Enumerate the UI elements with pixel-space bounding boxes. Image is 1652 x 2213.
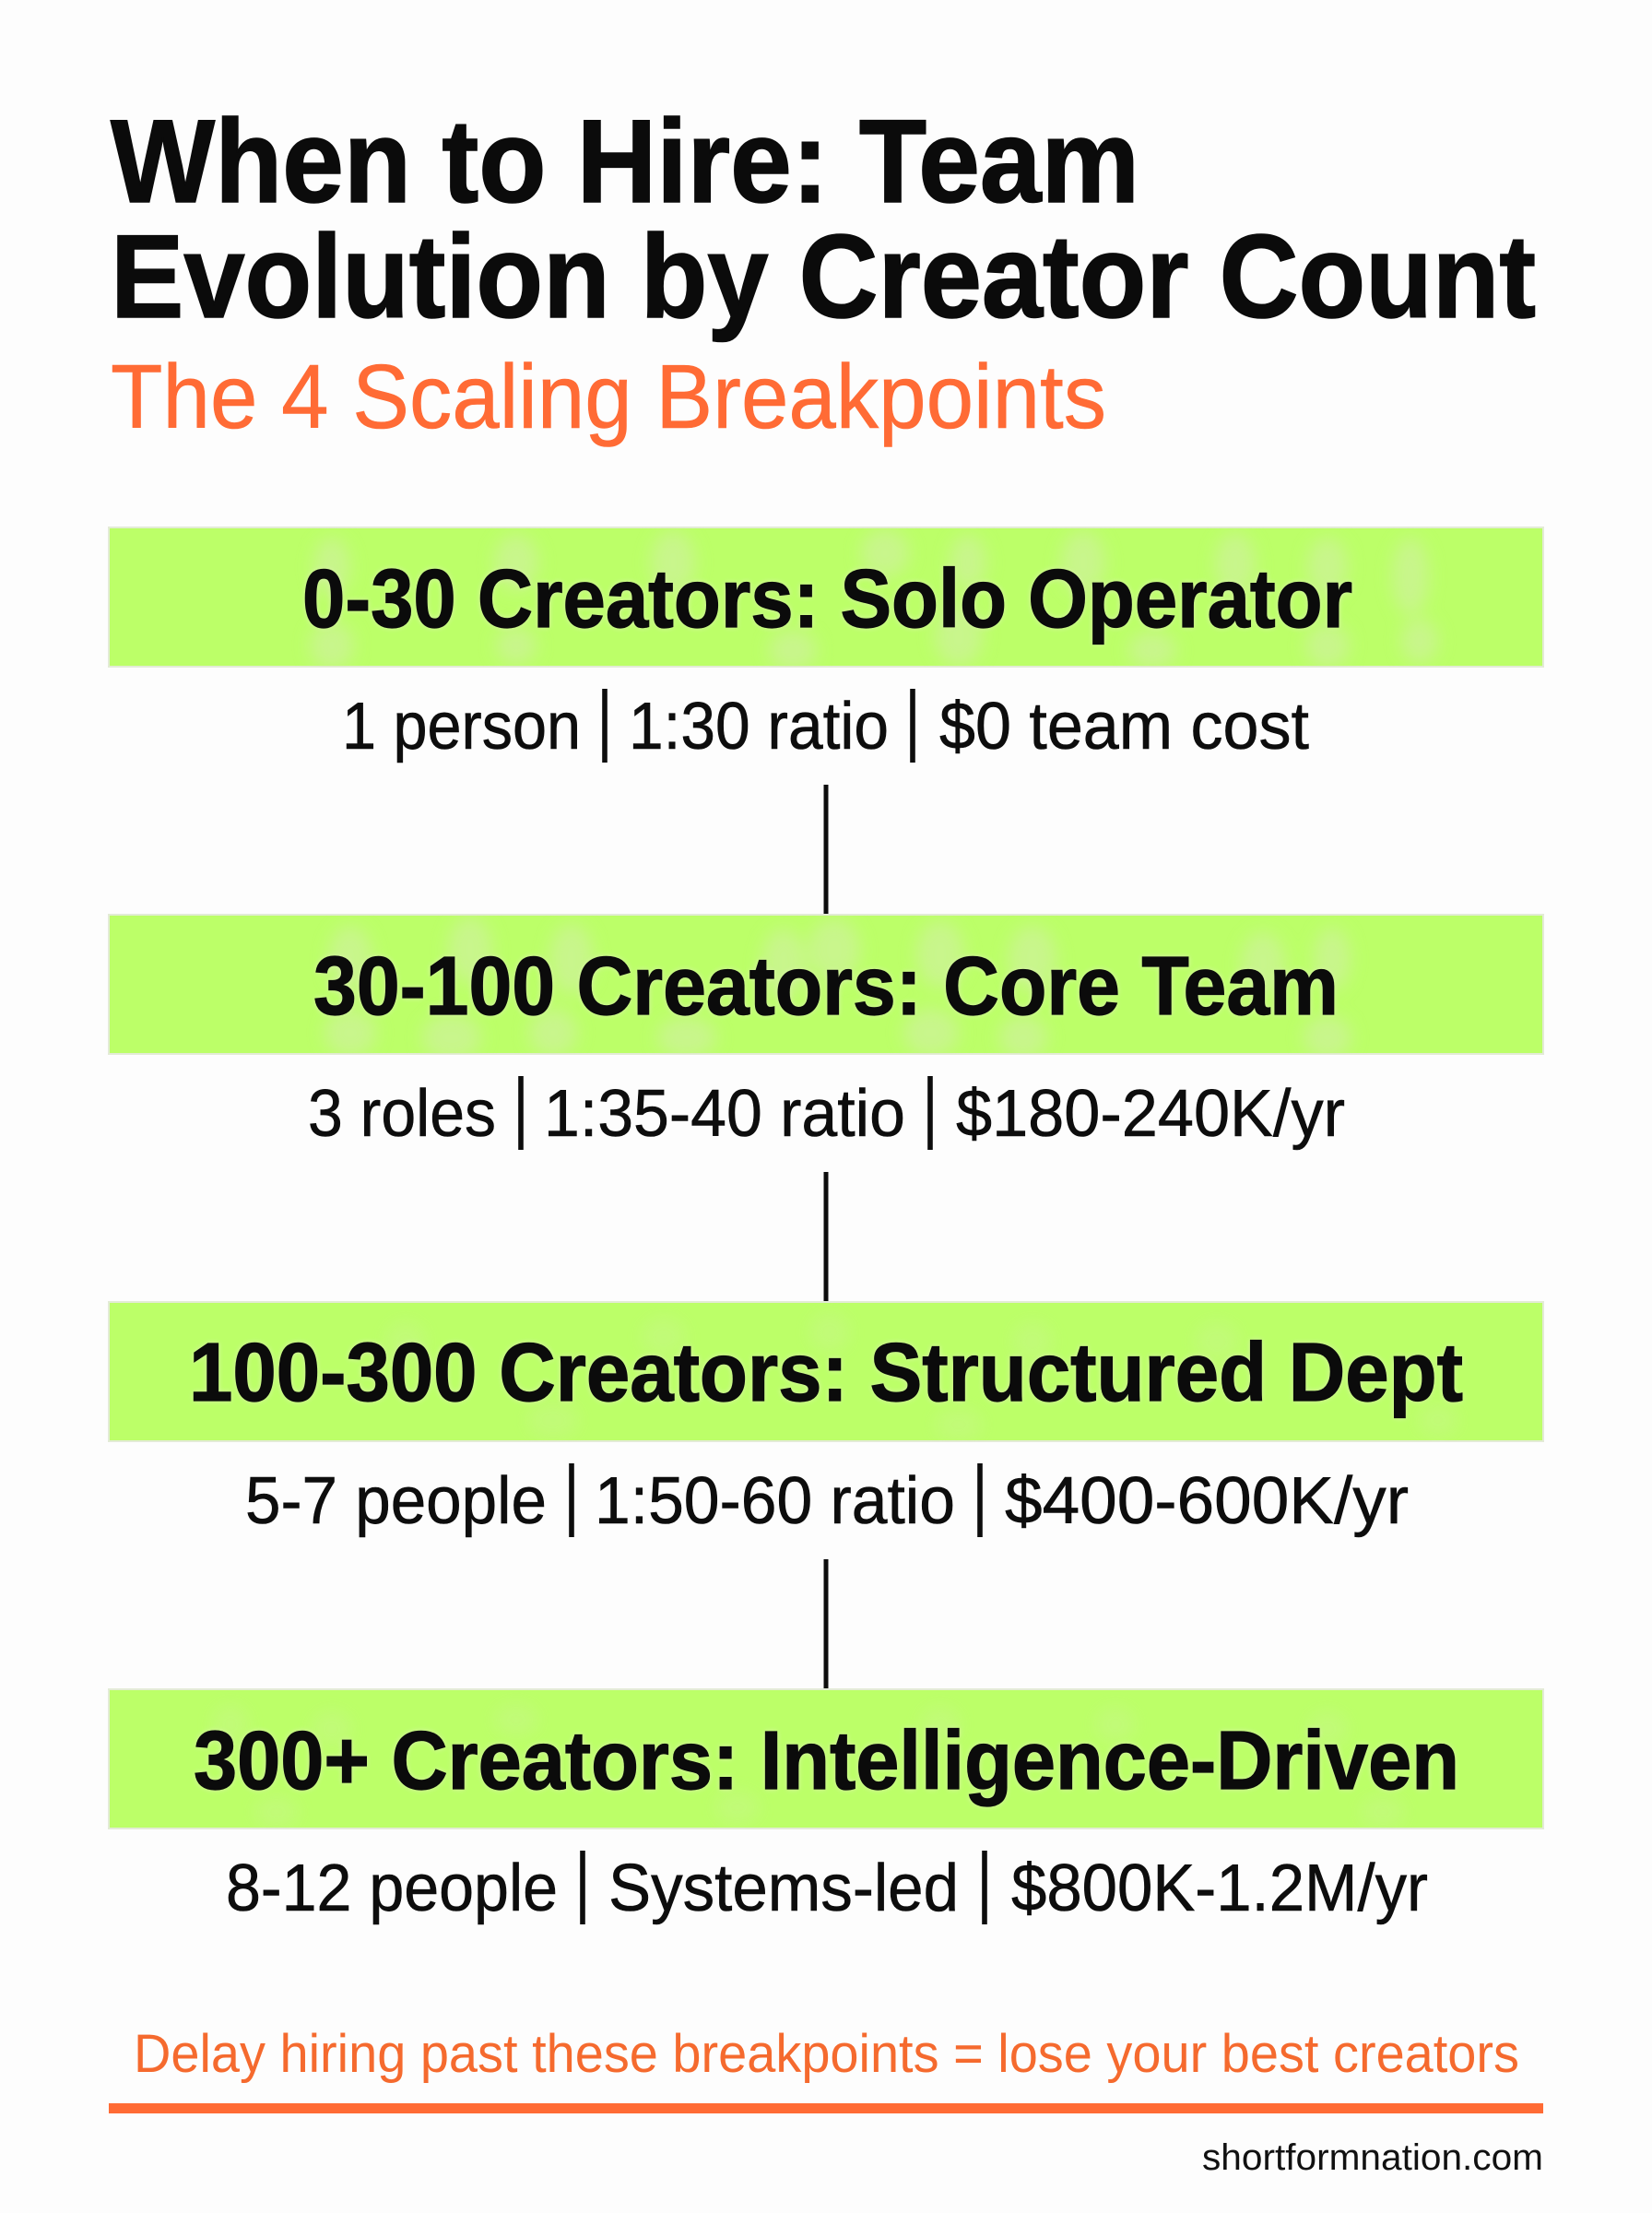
stats: 100-300 creators: 1:50-60 ratio [595,1464,955,1538]
stats: 30-100 creators: $180-240K/yr [956,1077,1345,1151]
stats: 0-30 creators: 1 person [342,690,581,763]
panel: 0-30 creators [109,527,1543,670]
panel: 30-100 creators [109,915,1543,1061]
heading: 0-30 creators: 0-30 Creators: Solo Operator [302,553,1352,645]
heading: 300+ creators: 300+ Creators: Intelligence-Driven [194,1715,1459,1807]
connector arrow 2 [824,1172,828,1302]
stats: 300+ creators: | [976,1838,993,1925]
connector arrow 3 [824,1559,828,1689]
stats: 300+ creators: $800K-1.2M/yr [1011,1852,1428,1925]
stats: 30-100 creators [308,1063,1345,1151]
stats: 0-30 creators: | [904,676,921,763]
title: Evolution by Creator Count [111,211,1536,343]
stats: 30-100 creators: 3 roles [308,1077,496,1151]
panel: 100-300 creators [109,1302,1543,1441]
stats: 300+ creators [226,1838,1428,1925]
stats: 100-300 creators [245,1450,1409,1538]
footer: website: shortformnation.com [1202,2137,1543,2178]
stats: 300+ creators: | [574,1838,591,1925]
stats: 0-30 creators: $0 team cost [939,690,1309,763]
connector arrow 1 [824,785,828,915]
orange rule [109,2103,1543,2113]
heading: 30-100 creators: 30-100 Creators: Core Team [313,941,1339,1033]
stats: 0-30 creators [342,676,1309,763]
stats: 30-100 creators: | [922,1063,938,1151]
title [111,96,1536,343]
stats: 30-100 creators: | [513,1063,529,1151]
stats: 100-300 creators: 5-7 people [245,1464,547,1538]
stats: 0-30 creators: | [596,676,613,763]
stats: 0-30 creators: 1:30 ratio [629,690,889,763]
stats: 100-300 creators: | [972,1450,988,1538]
subtitle: The 4 Scaling Breakpoints [111,346,1106,447]
stats: 300+ creators: Systems-led [608,1852,959,1925]
title: When to Hire: Team [111,96,1139,228]
stats: 30-100 creators: 1:35-40 ratio [544,1077,905,1151]
panel: 300+ creators [109,1689,1543,1828]
stats: 100-300 creators: $400-600K/yr [1005,1464,1409,1538]
heading: 100-300 creators: 100-300 Creators: Structured Dept [189,1327,1463,1419]
stats: 300+ creators: 8-12 people [226,1852,558,1925]
stats: 100-300 creators: | [563,1450,580,1538]
callout: warning line: Delay hiring past these breakpoints = lose your best creators [134,2024,1519,2084]
